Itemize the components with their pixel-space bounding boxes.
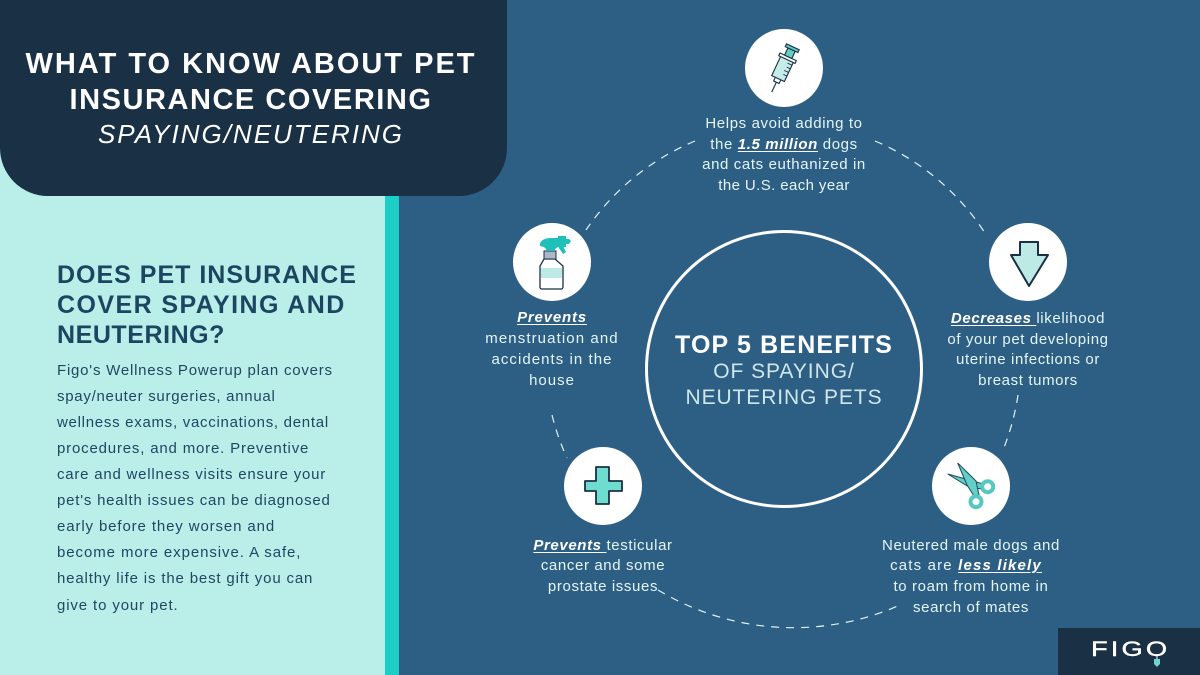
panel: blue background <box>399 0 1200 675</box>
text block: wellness description: give to your pet. <box>57 597 179 614</box>
benefit text: testicular: Prevents testicular <box>533 537 673 554</box>
text block: wellness description: procedures, and more. Preventive <box>57 440 309 457</box>
icon: down arrow <box>989 223 1067 301</box>
benefit text: menstruation: Prevents <box>517 309 587 326</box>
benefit text: infections: breast tumors <box>978 372 1078 389</box>
title line 1: WHAT TO KNOW ABOUT PET <box>25 48 477 80</box>
center text <box>675 331 893 409</box>
heading: does pet insurance cover: DOES PET INSURANCE <box>57 261 357 289</box>
center ring <box>645 230 923 508</box>
icon: syringe <box>745 29 823 107</box>
icon: spray bottle <box>513 223 591 301</box>
benefit text: euthanasia <box>702 115 866 194</box>
icon: scissors <box>932 447 1010 525</box>
center text: NEUTERING PETS <box>686 386 882 409</box>
panel: left light background <box>0 0 385 675</box>
text block: wellness description: pet's health issues can be diagnosed <box>57 492 331 509</box>
benefit text: infections: Decreases likelihood <box>951 310 1105 327</box>
text block: wellness description: early before they worsen and <box>57 518 275 535</box>
benefit text: menstruation: menstruation and <box>485 330 619 347</box>
text block: wellness description: spay/neuter surgeries, annual <box>57 388 276 405</box>
benefit text: testicular <box>533 537 673 595</box>
benefit text: euthanasia: the U.S. each year <box>718 177 850 194</box>
heading: does pet insurance cover: COVER SPAYING AND <box>57 291 346 319</box>
benefit text: menstruation <box>485 309 619 389</box>
benefit text: roaming: to roam from home in <box>894 578 1048 595</box>
teal divider bar <box>385 0 399 675</box>
benefit text: euthanasia: the 1.5 million dogs <box>710 136 858 153</box>
benefit text: menstruation: house <box>529 372 575 389</box>
text block: wellness description: become more expensive. A safe, <box>57 544 301 561</box>
benefit text: infections: of your pet developing <box>947 331 1109 348</box>
text block: wellness description: care and wellness visits ensure your <box>57 466 326 483</box>
center text: OF SPAYING/ <box>713 360 855 383</box>
benefit text: roaming: cats are less likely <box>890 557 1042 574</box>
text block: wellness description: healthy life is the best gift you can <box>57 570 313 587</box>
benefit text: menstruation: accidents in the <box>491 351 613 368</box>
benefit text: roaming: Neutered male dogs and <box>882 537 1060 554</box>
title line 2: INSURANCE COVERING <box>69 84 433 116</box>
benefit text: testicular: cancer and some <box>541 557 665 574</box>
title banner <box>0 0 507 196</box>
benefit text: testicular: prostate issues <box>548 578 658 595</box>
icon: plus cross <box>564 447 642 525</box>
text block: wellness description <box>57 362 333 614</box>
benefit text: infections <box>947 310 1109 389</box>
center text: TOP 5 BENEFITS <box>675 331 893 359</box>
title line 3: SPAYING/NEUTERING <box>98 119 404 149</box>
benefit text: infections: uterine infections or <box>956 351 1100 368</box>
heading: does pet insurance cover: NEUTERING? <box>57 321 225 349</box>
logo: FIGO: FIGO <box>1091 638 1170 661</box>
text block: wellness description: wellness exams, vaccinations, dental <box>57 414 329 431</box>
logo: FIGO <box>1058 628 1200 675</box>
benefit text: roaming: search of mates <box>913 599 1029 616</box>
text block: wellness description: Figo's Wellness Powerup plan covers <box>57 362 333 379</box>
heading: does pet insurance cover <box>57 261 357 349</box>
benefit text: euthanasia: and cats euthanized in <box>702 156 866 173</box>
benefit text: euthanasia: Helps avoid adding to <box>705 115 863 132</box>
benefit text: roaming <box>882 537 1060 616</box>
